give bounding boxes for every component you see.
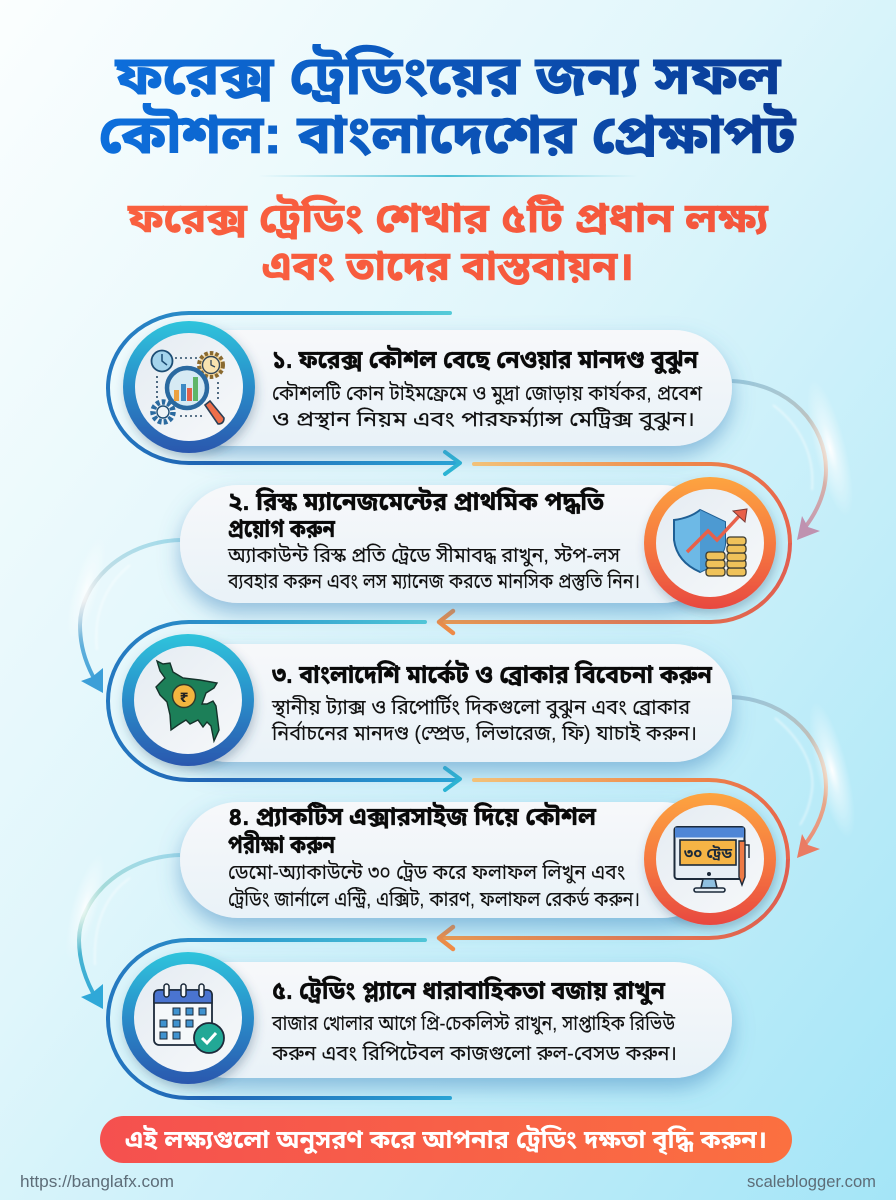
step 1	[108, 313, 732, 474]
subtitle: ফরেক্স ট্রেডিং শেখার ৫টি প্রধান লক্ষ্য	[127, 194, 768, 241]
step 4 track	[439, 780, 788, 949]
step 2 heading: প্রয়োগ করুন	[228, 515, 335, 543]
step 4 body: ট্রেডিং জার্নালে এন্ট্রি, এক্সিট, কারণ, ফলাফল রেকর্ড করুন।	[228, 886, 640, 911]
step 3 card	[170, 644, 732, 762]
step 2 badge	[644, 477, 776, 609]
connector arrow 3 to 4	[732, 697, 864, 858]
step 4 body: ডেমো-অ্যাকাউন্টে ৩০ ট্রেড করে ফলাফল লিখুন এবং	[228, 860, 625, 884]
step 5 badge	[122, 952, 254, 1084]
step 3	[108, 622, 732, 790]
step 5 track	[108, 940, 450, 1098]
step 3 body	[271, 693, 697, 745]
step 5 body: করুন এবং রিপিটেবল কাজগুলো রুল-বেসড করুন।	[271, 1041, 677, 1065]
step 1 body	[272, 380, 703, 431]
step 4 heading: পরীক্ষা করুন	[228, 830, 335, 859]
icon: magnifier, chart, gears	[152, 350, 224, 424]
step 3 heading: ৩. বাংলাদেশি মার্কেট ও ব্রোকার বিবেচনা করুন	[272, 659, 712, 689]
step 5	[108, 940, 732, 1098]
step 2 body: ব্যবহার করুন এবং লস ম্যানেজ করতে মানসিক প্রস্তুতি নিন।	[227, 569, 640, 593]
step 1 body: কৌশলটি কোন টাইমফ্রেমে ও মুদ্রা জোড়ায় কার্যকর, প্রবেশ	[272, 380, 703, 405]
title: ফরেক্স ট্রেডিংয়ের জন্য সফল	[114, 45, 782, 106]
icon: Bangladesh map with coin: ₹	[179, 689, 189, 706]
bottom banner	[100, 1116, 792, 1163]
step 5 heading: ৫. ট্রেডিং প্ল্যানে ধারাবাহিকতা বজায় রাখুন	[272, 976, 665, 1006]
icon: monitor with 30 trades and pen: ৩০ ট্রেড	[684, 845, 733, 861]
step 2 card	[180, 485, 720, 603]
step 2	[180, 464, 790, 633]
step 2 track	[439, 464, 790, 633]
step 1 badge	[123, 321, 255, 453]
step 5 card	[170, 962, 732, 1078]
title	[98, 45, 796, 165]
step 1 body: ও প্রস্থান নিয়ম এবং পারফর্ম্যান্স মেট্রিক্স বুঝুন।	[272, 406, 695, 431]
step 2 body	[227, 543, 640, 593]
step 2 heading	[228, 487, 604, 543]
connector arrow 4 to 5	[57, 851, 180, 1009]
step 3 track	[108, 622, 460, 790]
bottom banner: এই লক্ষ্যগুলো অনুসরণ করে আপনার ট্রেডিং দক্ষতা বৃদ্ধি করুন।	[125, 1125, 767, 1156]
step 4 card	[180, 802, 720, 918]
step 1 track	[108, 313, 460, 474]
step 5 body: বাজার খোলার আগে প্রি-চেকলিস্ট রাখুন, সাপ্তাহিক রিভিউ	[271, 1011, 675, 1035]
step 3 body: নির্বাচনের মানদণ্ড (স্প্রেড, লিভারেজ, ফি) যাচাই করুন।	[271, 720, 697, 745]
icon: shield, arrow, coins	[674, 509, 747, 576]
step 4 heading: ৪. প্র্যাকটিস এক্সারসাইজ দিয়ে কৌশল	[228, 802, 597, 831]
step 1 card	[170, 330, 732, 446]
step 4	[180, 780, 788, 949]
step 4 body	[228, 860, 640, 911]
subtitle	[127, 194, 768, 289]
step 4 badge	[644, 793, 776, 925]
step 3 body: স্থানীয় ট্যাক্স ও রিপোর্টিং দিকগুলো বুঝুন এবং ব্রোকার	[271, 693, 691, 719]
step 2 heading: ২. রিস্ক ম্যানেজমেন্টের প্রাথমিক পদ্ধতি	[228, 487, 604, 516]
step 3 badge	[122, 634, 254, 766]
step 2 body: অ্যাকাউন্ট রিস্ক প্রতি ট্রেডে সীমাবদ্ধ রাখুন, স্টপ-লস	[227, 543, 620, 567]
title: কৌশল: বাংলাদেশের প্রেক্ষাপট	[98, 104, 796, 165]
step 1 heading: ১. ফরেক্স কৌশল বেছে নেওয়ার মানদণ্ড বুঝুন	[272, 345, 698, 375]
footer: right url: scaleblogger.com	[747, 1173, 876, 1191]
step 4 heading	[228, 802, 597, 859]
subtitle: এবং তাদের বাস্তবায়ন।	[262, 243, 634, 289]
connector arrow 2 to 3	[58, 534, 180, 693]
connector arrow 1 to 2	[732, 376, 862, 540]
icon: calendar with check	[154, 984, 224, 1053]
footer: left url: https://banglafx.com	[20, 1173, 174, 1191]
step 5 body	[271, 1011, 677, 1065]
